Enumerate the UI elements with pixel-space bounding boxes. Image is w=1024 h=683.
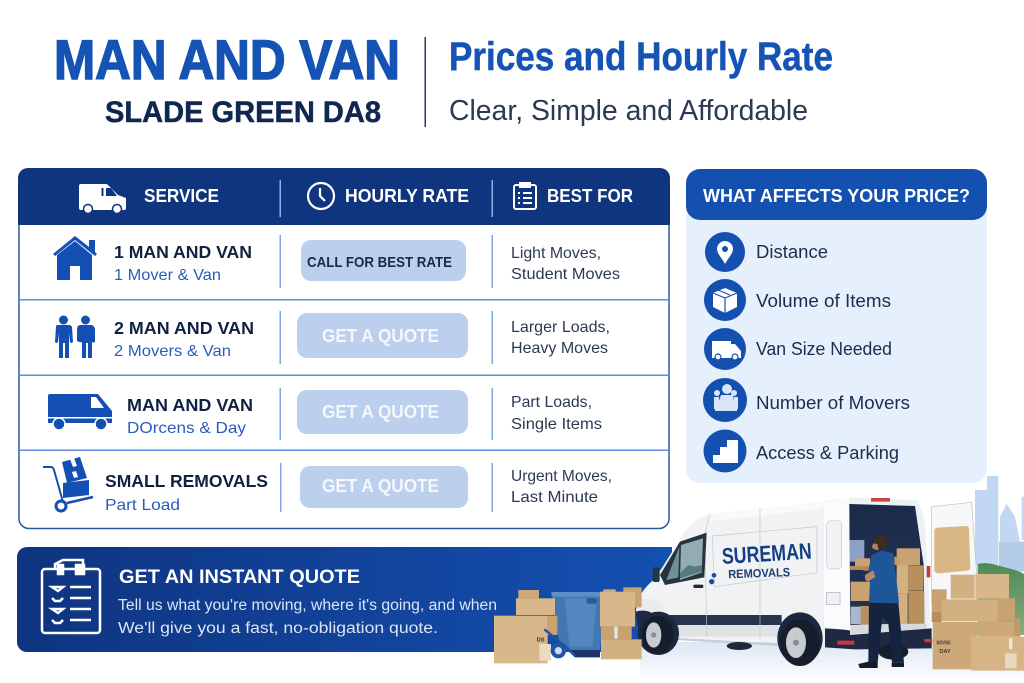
panel: instant quote banner	[17, 547, 672, 652]
icon: clock	[308, 183, 334, 209]
title: Man and Van	[54, 28, 400, 129]
logo: sureman removals: REMOVALS	[728, 565, 790, 581]
row: 1 man and van: Light Moves,	[511, 245, 601, 262]
icon: checklist	[514, 183, 536, 209]
scene: van side	[636, 502, 825, 666]
wheelie bin	[551, 592, 605, 657]
scene: boxes and bin left	[494, 587, 642, 663]
panel: instant quote banner: Tell us what you're moving, where it's going, and when	[118, 597, 497, 614]
panel: what affects your price: WHAT AFFECTS YOUR PRICE?	[703, 185, 970, 206]
icon: van	[48, 394, 113, 430]
boxes right: DAY	[939, 649, 951, 655]
open left door	[824, 497, 850, 631]
panel: pricing table	[18, 168, 670, 528]
subtitle: prices and hourly rate	[449, 35, 833, 127]
item: distance	[705, 232, 828, 272]
button: get a quote	[297, 390, 468, 434]
icon: hand truck with boxes	[43, 457, 93, 511]
row: man and van: DOrcens & Day	[127, 420, 246, 437]
boxes right: MOVING	[937, 640, 951, 646]
icon: house	[53, 236, 97, 280]
row: small removals: Last Minute	[511, 489, 598, 506]
floor shadow	[640, 642, 1024, 683]
item: number of movers	[703, 378, 910, 422]
rear wheel	[777, 612, 823, 666]
van body	[636, 502, 825, 645]
table header: BEST FOR	[547, 186, 633, 206]
logo: sureman removals	[721, 538, 812, 581]
row: 1 man and van	[53, 236, 620, 284]
row: 2 man and van: 2 Movers & Van	[114, 343, 231, 360]
item: volume of items	[704, 279, 891, 321]
row: 1 man and van: 1 MAN AND VAN	[114, 242, 252, 262]
subtitle: prices and hourly rate: Clear, Simple and Affordable	[449, 95, 808, 127]
button: get a quote	[300, 466, 468, 508]
front wheel	[638, 612, 679, 655]
panel: instant quote banner: GET AN INSTANT QUOTE	[119, 566, 360, 588]
panel: instant quote banner: We'll give you a fast, no-obligation quote.	[118, 620, 438, 637]
item: van size needed: Van Size Needed	[756, 339, 892, 359]
title: Man and Van: SLADE GREEN DA8	[105, 96, 381, 129]
mover	[858, 535, 904, 668]
windows	[660, 533, 707, 585]
button: get a quote: GET A QUOTE	[322, 402, 439, 422]
title: Man and Van: MAN AND VAN	[54, 28, 400, 91]
row: 2 man and van	[55, 313, 610, 360]
row: man and van: Single Items	[511, 416, 602, 433]
scene: boxes and bin left: DS	[537, 638, 545, 644]
row: man and van: Part Loads,	[511, 394, 592, 411]
cargo boxes in van	[849, 540, 924, 625]
icon: two movers	[55, 316, 95, 358]
item: distance: Distance	[756, 242, 828, 262]
scene: skyline and trees	[975, 476, 1024, 635]
open right door	[932, 502, 977, 603]
hand trolley	[544, 629, 575, 658]
icon: clipboard	[42, 560, 100, 633]
button: call for best rate	[301, 240, 466, 281]
row: small removals: Urgent Moves,	[511, 468, 612, 485]
row: 1 man and van: Student Moves	[511, 266, 620, 283]
button: call for best rate: CALL FOR BEST RATE	[307, 254, 452, 271]
item: number of movers: Number of Movers	[756, 393, 910, 413]
item: access and parking	[704, 430, 899, 472]
row: man and van: MAN AND VAN	[127, 395, 253, 415]
item: volume of items: Volume of Items	[756, 291, 891, 311]
item: van size needed	[704, 328, 892, 370]
table header: SERVICE	[144, 186, 219, 206]
icon: van	[79, 184, 126, 214]
table header	[18, 168, 670, 225]
boxes right	[932, 574, 1024, 671]
button: get a quote: GET A QUOTE	[322, 326, 439, 346]
row: 1 man and van: 1 Mover & Van	[114, 267, 221, 284]
logo: sureman removals: SUREMAN	[721, 538, 812, 569]
subtitle: prices and hourly rate: Prices and Hourly Rate	[449, 35, 833, 79]
row: small removals: Part Load	[105, 497, 180, 514]
row: 2 man and van: 2 MAN AND VAN	[114, 318, 254, 338]
panel: what affects your price	[686, 169, 987, 483]
item: access and parking: Access & Parking	[756, 443, 899, 463]
row: 2 man and van: Larger Loads,	[511, 319, 610, 336]
row: small removals: SMALL REMOVALS	[105, 471, 268, 491]
button: get a quote	[297, 313, 468, 358]
row: 2 man and van: Heavy Moves	[511, 340, 608, 357]
row: small removals	[43, 457, 612, 514]
row: man and van	[48, 390, 602, 437]
button: get a quote: GET A QUOTE	[322, 476, 439, 496]
scene: van rear and cargo	[823, 497, 1024, 671]
table header: HOURLY RATE	[345, 186, 469, 206]
